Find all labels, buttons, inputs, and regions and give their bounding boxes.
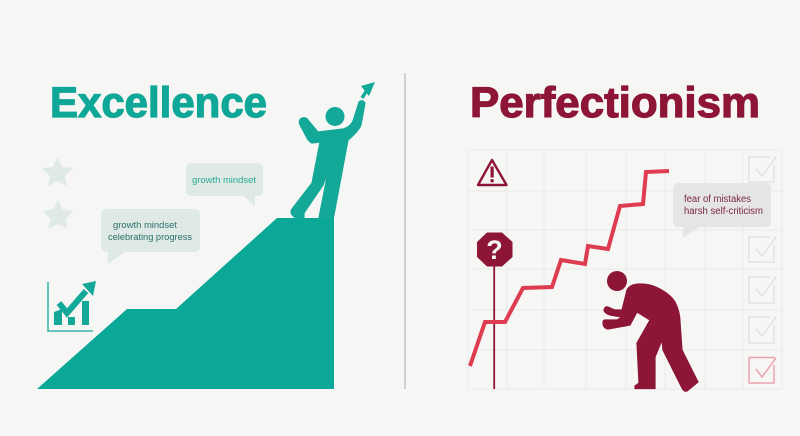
speech bubble: growth mindset: growth mindset [192, 175, 256, 186]
icon: warning triangle [478, 160, 506, 185]
speech bubble: growth mindset, celebrating progress [101, 209, 200, 264]
icon: growth chart [48, 281, 96, 331]
figure: hunched person [603, 271, 698, 391]
speech bubble: growth mindset, celebrating progress: growth mindset [113, 220, 177, 231]
figure: person reaching up [291, 101, 365, 218]
heading: Excellence: Excellence [50, 79, 267, 127]
icon: star top [42, 157, 73, 186]
speech bubble: fear of mistakes, harsh self-criticism: harsh self-criticism [684, 206, 763, 217]
mountain [37, 218, 334, 389]
speech bubble: growth mindset, celebrating progress: celebrating progress [108, 232, 192, 243]
divider [404, 73, 406, 389]
red jagged progress line [470, 171, 669, 366]
speech bubble: fear of mistakes, harsh self-criticism: fear of mistakes [684, 194, 751, 205]
icon: question stop sign: ? [486, 235, 503, 265]
chart grid [468, 150, 782, 389]
icon: arrow up-right [361, 82, 375, 98]
icon: question stop sign [477, 232, 512, 389]
heading: Perfectionism: Perfectionism [470, 79, 760, 127]
checkbox: highlighted [749, 358, 776, 383]
speech bubble: growth mindset [186, 163, 263, 206]
icon: star bottom [42, 200, 74, 229]
checklist boxes [749, 157, 776, 343]
speech bubble: fear of mistakes, harsh self-criticism [673, 183, 771, 238]
